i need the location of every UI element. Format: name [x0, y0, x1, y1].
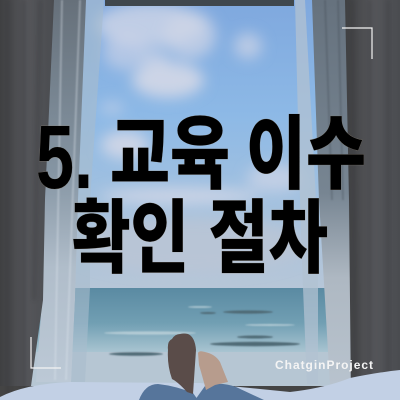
right curtain	[295, 0, 400, 400]
title: 5.	[36, 108, 93, 208]
jeans	[139, 384, 264, 400]
title: 교육	[110, 110, 230, 199]
window frame top	[105, 0, 294, 6]
corner bracket top right	[342, 28, 372, 59]
corner bracket bottom left	[31, 337, 61, 368]
feet	[168, 334, 228, 394]
brand label: ChatginProject	[275, 358, 373, 372]
title: 절차	[209, 194, 328, 283]
title: 확인	[72, 194, 189, 283]
clouds	[70, 3, 310, 273]
sea	[30, 288, 370, 352]
bed sheets	[0, 370, 400, 400]
sky	[30, 0, 370, 288]
title	[36, 108, 366, 283]
wave foam	[104, 306, 295, 335]
title: 이수	[246, 110, 366, 199]
rocks	[109, 310, 300, 356]
left curtain	[0, 0, 104, 400]
beach	[30, 352, 370, 386]
